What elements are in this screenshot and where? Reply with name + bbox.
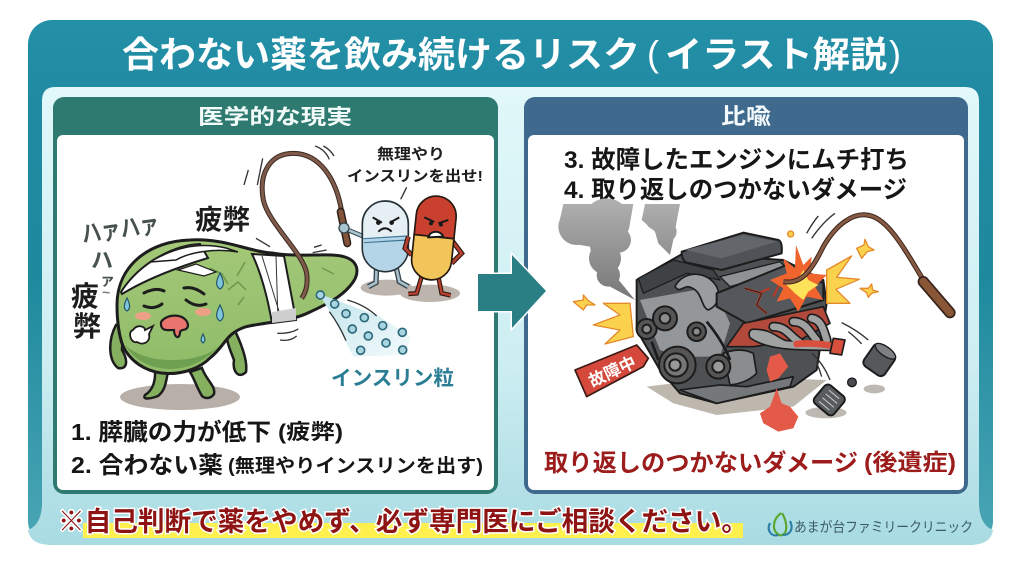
- speech text: pills shouting: インスリンを出せ!: [347, 168, 483, 185]
- text: point 2: (無理やりインスリンを出す): [228, 455, 483, 477]
- title: イラスト解説: [665, 34, 887, 75]
- title: (: [647, 33, 659, 74]
- icon: insulin spray: [316, 291, 410, 357]
- speech text: pills shouting: [347, 146, 483, 185]
- footer warning: ※自己判断で薬をやめず、必ず専門医にご相談ください。: [58, 506, 748, 537]
- text: panting vertical: ハ: [91, 248, 113, 273]
- footer highlight: [83, 523, 743, 538]
- text: panting vertical: ~: [102, 284, 110, 300]
- clinic name: あまが台ファミリークリニック: [794, 519, 973, 535]
- text: point 4: 4. 取り返しのつかないダメージ: [564, 175, 907, 204]
- text: exhausted label: 疲弊: [195, 204, 250, 235]
- text: exhausted vertical label: 弊: [73, 311, 101, 342]
- tag: out of order: [575, 345, 648, 397]
- text: point 2: 2. 合わない薬: [71, 452, 223, 478]
- icon: broken engine: [637, 233, 845, 415]
- bandage: [121, 244, 208, 294]
- text: exhausted vertical label: 疲: [71, 281, 99, 312]
- title: [122, 33, 901, 75]
- engine pulleys: [637, 306, 730, 383]
- text: point 1: 1. 膵臓の力が低下: [71, 418, 271, 445]
- text: irreversible damage caption: 取り返しのつかないダメージ: [544, 449, 858, 477]
- clinic logo: [769, 513, 973, 535]
- panel frame: [524, 97, 968, 494]
- tag: out of order: 故障中: [586, 353, 639, 391]
- text: panting vertical: ァ: [100, 272, 115, 289]
- icon: tired bandaged pancreas: [110, 240, 357, 410]
- arrow: [478, 255, 546, 328]
- text: point 1: (疲弊): [278, 421, 343, 444]
- icon: loose engine parts and oil: [760, 340, 898, 432]
- panel frame: [53, 97, 498, 494]
- icon: whip and pills: [244, 146, 462, 340]
- text: panting: ハァハァ: [80, 210, 161, 249]
- panel: medical reality: [53, 97, 498, 494]
- text: panting vertical: [91, 248, 115, 300]
- icon: smoke: [558, 198, 680, 300]
- text: point 3: 3. 故障したエンジンにムチ打ち: [564, 146, 909, 174]
- text: point 1: [71, 418, 343, 445]
- face: [144, 288, 206, 308]
- speech text: pills shouting: 無理やり: [377, 146, 445, 163]
- exhaust manifold: [753, 318, 837, 347]
- inner light panel: [28, 87, 993, 545]
- panel: metaphor: [524, 97, 968, 494]
- text: irreversible damage caption: (後遺症): [864, 449, 956, 475]
- icon: whip on engine: [783, 215, 950, 313]
- title: ): [889, 33, 901, 74]
- text: exhausted vertical label: [71, 281, 101, 342]
- title: 合わない薬を飲み続けるリスク: [122, 34, 640, 75]
- panel heading: 医学的な現実: [198, 106, 352, 129]
- icon: clinic logo mark: [769, 513, 792, 535]
- label: insulin granules: インスリン粒: [331, 367, 454, 390]
- panel heading: 比喩: [721, 104, 771, 129]
- icon: sparks: [573, 213, 878, 380]
- text: point 2: [71, 452, 483, 478]
